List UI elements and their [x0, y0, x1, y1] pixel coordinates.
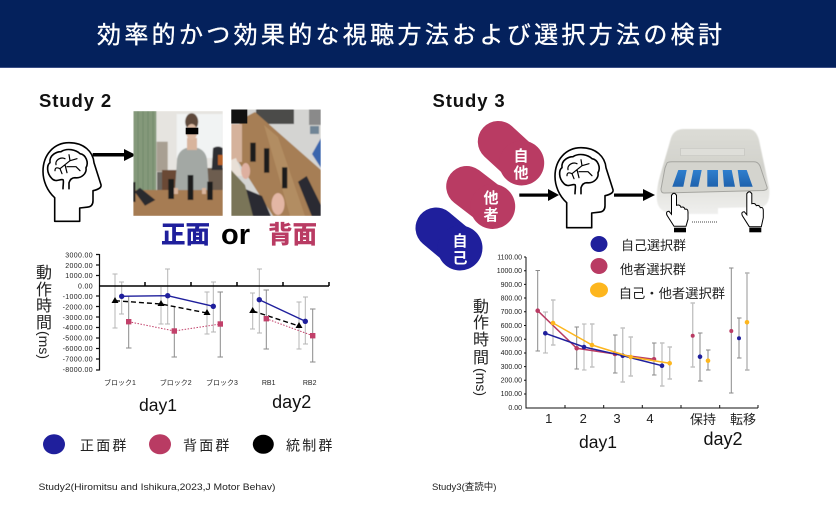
y axis tick labels: -5000.00: [63, 336, 93, 342]
y axis tick labels: 400.00: [501, 350, 522, 357]
y axis tick labels: 800.00: [501, 296, 522, 302]
blob: 自他: [498, 140, 544, 186]
y axis tick labels: 300.00: [501, 364, 522, 371]
title banner: [0, 0, 836, 68]
y axis title: 動: [36, 264, 52, 282]
y axis tick labels: 3000.00: [65, 252, 93, 260]
y axis tick labels: -3000.00: [63, 315, 93, 322]
x category labels: 1: [545, 411, 552, 426]
citation: Study 2: Study2(Hiromitsu and Ishikura,2023,J Motor Behav): [38, 482, 276, 493]
x category labels: ブロック1: [104, 378, 136, 387]
label: day2 (Study 2): day2: [272, 392, 311, 412]
y axis tick labels: 500.00: [501, 336, 522, 344]
series: self and other group: [551, 320, 749, 366]
error bars: [112, 269, 316, 362]
citation: Study 3: Study3(査読中): [432, 481, 496, 493]
series: back group: [126, 316, 315, 338]
photo: front view: [133, 111, 223, 216]
blob: 他者: 者: [483, 207, 499, 224]
icon: keypad device with hands: [657, 129, 769, 232]
x category labels: [545, 411, 756, 427]
left hand: [667, 193, 688, 232]
y axis tick labels: -6000.00: [63, 346, 93, 353]
blob: 他者: [467, 184, 515, 229]
label: day2 (Study 3): day2: [703, 429, 743, 449]
legend: Study 2 groups: 統制群: [286, 438, 335, 454]
x category labels: 3: [613, 411, 621, 426]
blob: 自他: 自: [513, 147, 529, 165]
label: 正面 or 背面: 正面: [161, 222, 210, 249]
y axis title: 時: [36, 297, 52, 315]
x category labels: RB1: [262, 380, 276, 387]
y axis tick labels: -2000.00: [63, 304, 93, 312]
x category labels: RB2: [303, 380, 317, 387]
label: day1 (Study 3): day1: [579, 432, 617, 452]
x category labels: 2: [580, 411, 587, 426]
y axis tick labels: -7000.00: [63, 356, 93, 364]
y axis title: 動: [473, 298, 489, 316]
arrow: blobs to brain: [519, 189, 559, 201]
label: 正面 or 背面: [161, 219, 317, 251]
x category labels: 4: [646, 411, 654, 426]
y axis tick labels: 0.00: [78, 284, 93, 290]
y axis title: (ms): [36, 331, 52, 359]
label: 正面 or 背面: or: [221, 219, 250, 251]
y axis title: (ms): [473, 368, 489, 396]
x category labels: ブロック2: [160, 378, 192, 387]
icon: head with brain (Study 3): [555, 148, 613, 228]
y axis tick labels: -4000.00: [63, 325, 93, 332]
y axis tick labels: 700.00: [501, 309, 522, 316]
x category labels: 転移: [730, 412, 756, 427]
y axis tick labels: 900.00: [501, 282, 522, 289]
blob: 他者: 他: [483, 190, 499, 207]
legend: Study 3 groups: 自己選択群: [621, 238, 686, 253]
legend: Study 3 groups: 自己・他者選択群: [619, 286, 725, 301]
y axis tick labels: 1100.00: [497, 254, 522, 262]
y axis title: 間: [473, 350, 489, 367]
y axis tick labels: -8000.00: [63, 367, 93, 374]
right hand: [742, 192, 763, 232]
heading: Study 2: Study 2: [39, 90, 112, 111]
legend: Study 3 groups: [590, 236, 725, 301]
y axis tick labels: 600.00: [501, 323, 522, 330]
photo: back view: [231, 109, 321, 216]
arrow: brain to device: [614, 189, 655, 201]
heading: Study 3: Study 3: [432, 90, 506, 111]
y axis tick labels: -1000.00: [63, 294, 93, 301]
title banner: 効率的かつ効果的な視聴方法および選択方法の検討: [97, 22, 722, 49]
icon: head with brain (Study 2): [43, 143, 101, 221]
legend: Study 2 groups: 背面群: [183, 438, 232, 454]
y axis title: [473, 298, 489, 396]
x category labels: [104, 378, 317, 387]
y axis tick labels: 200.00: [501, 378, 522, 384]
x category labels: ブロック3: [206, 378, 238, 387]
chart: Study 3 movement time: [473, 254, 758, 427]
y axis title: 間: [36, 315, 52, 332]
axis zero line: [99, 282, 329, 286]
y axis tick labels: 2000.00: [65, 263, 93, 270]
series: front group: [119, 293, 308, 324]
arrow: brain to photo (Study 2): [93, 149, 136, 161]
y axis title: 作: [36, 281, 52, 299]
y axis title: 時: [473, 331, 489, 349]
error bars: [536, 268, 750, 393]
blob: 自己: 己: [452, 250, 468, 267]
x category labels: 保持: [690, 412, 716, 427]
y axis tick labels: 0.00: [508, 405, 522, 412]
legend: Study 2 groups: [43, 434, 335, 454]
blob: 自己: [436, 226, 482, 270]
y axis tick labels: 1000.00: [65, 273, 93, 280]
series: self-selected group: [543, 331, 741, 368]
label: 正面 or 背面: 背面: [268, 221, 317, 249]
label: day1 (Study 2): day1: [139, 395, 177, 415]
y axis tick labels: [497, 254, 522, 412]
blob: 自己: 自: [452, 232, 468, 250]
y axis title: 作: [473, 314, 489, 332]
y axis tick labels: [63, 252, 93, 374]
legend: Study 3 groups: 他者選択群: [620, 262, 686, 277]
legend: Study 2 groups: 正面群: [80, 438, 129, 454]
y axis tick labels: 100.00: [501, 391, 522, 398]
chart: Study 2 movement time: [36, 252, 329, 387]
y axis title: [36, 264, 52, 359]
series: other-selected group: [535, 308, 733, 362]
blob: 自他: 他: [513, 165, 529, 182]
y axis tick labels: 1000.00: [497, 268, 522, 275]
series: control group: [112, 297, 302, 328]
redaction bar: [186, 128, 198, 134]
